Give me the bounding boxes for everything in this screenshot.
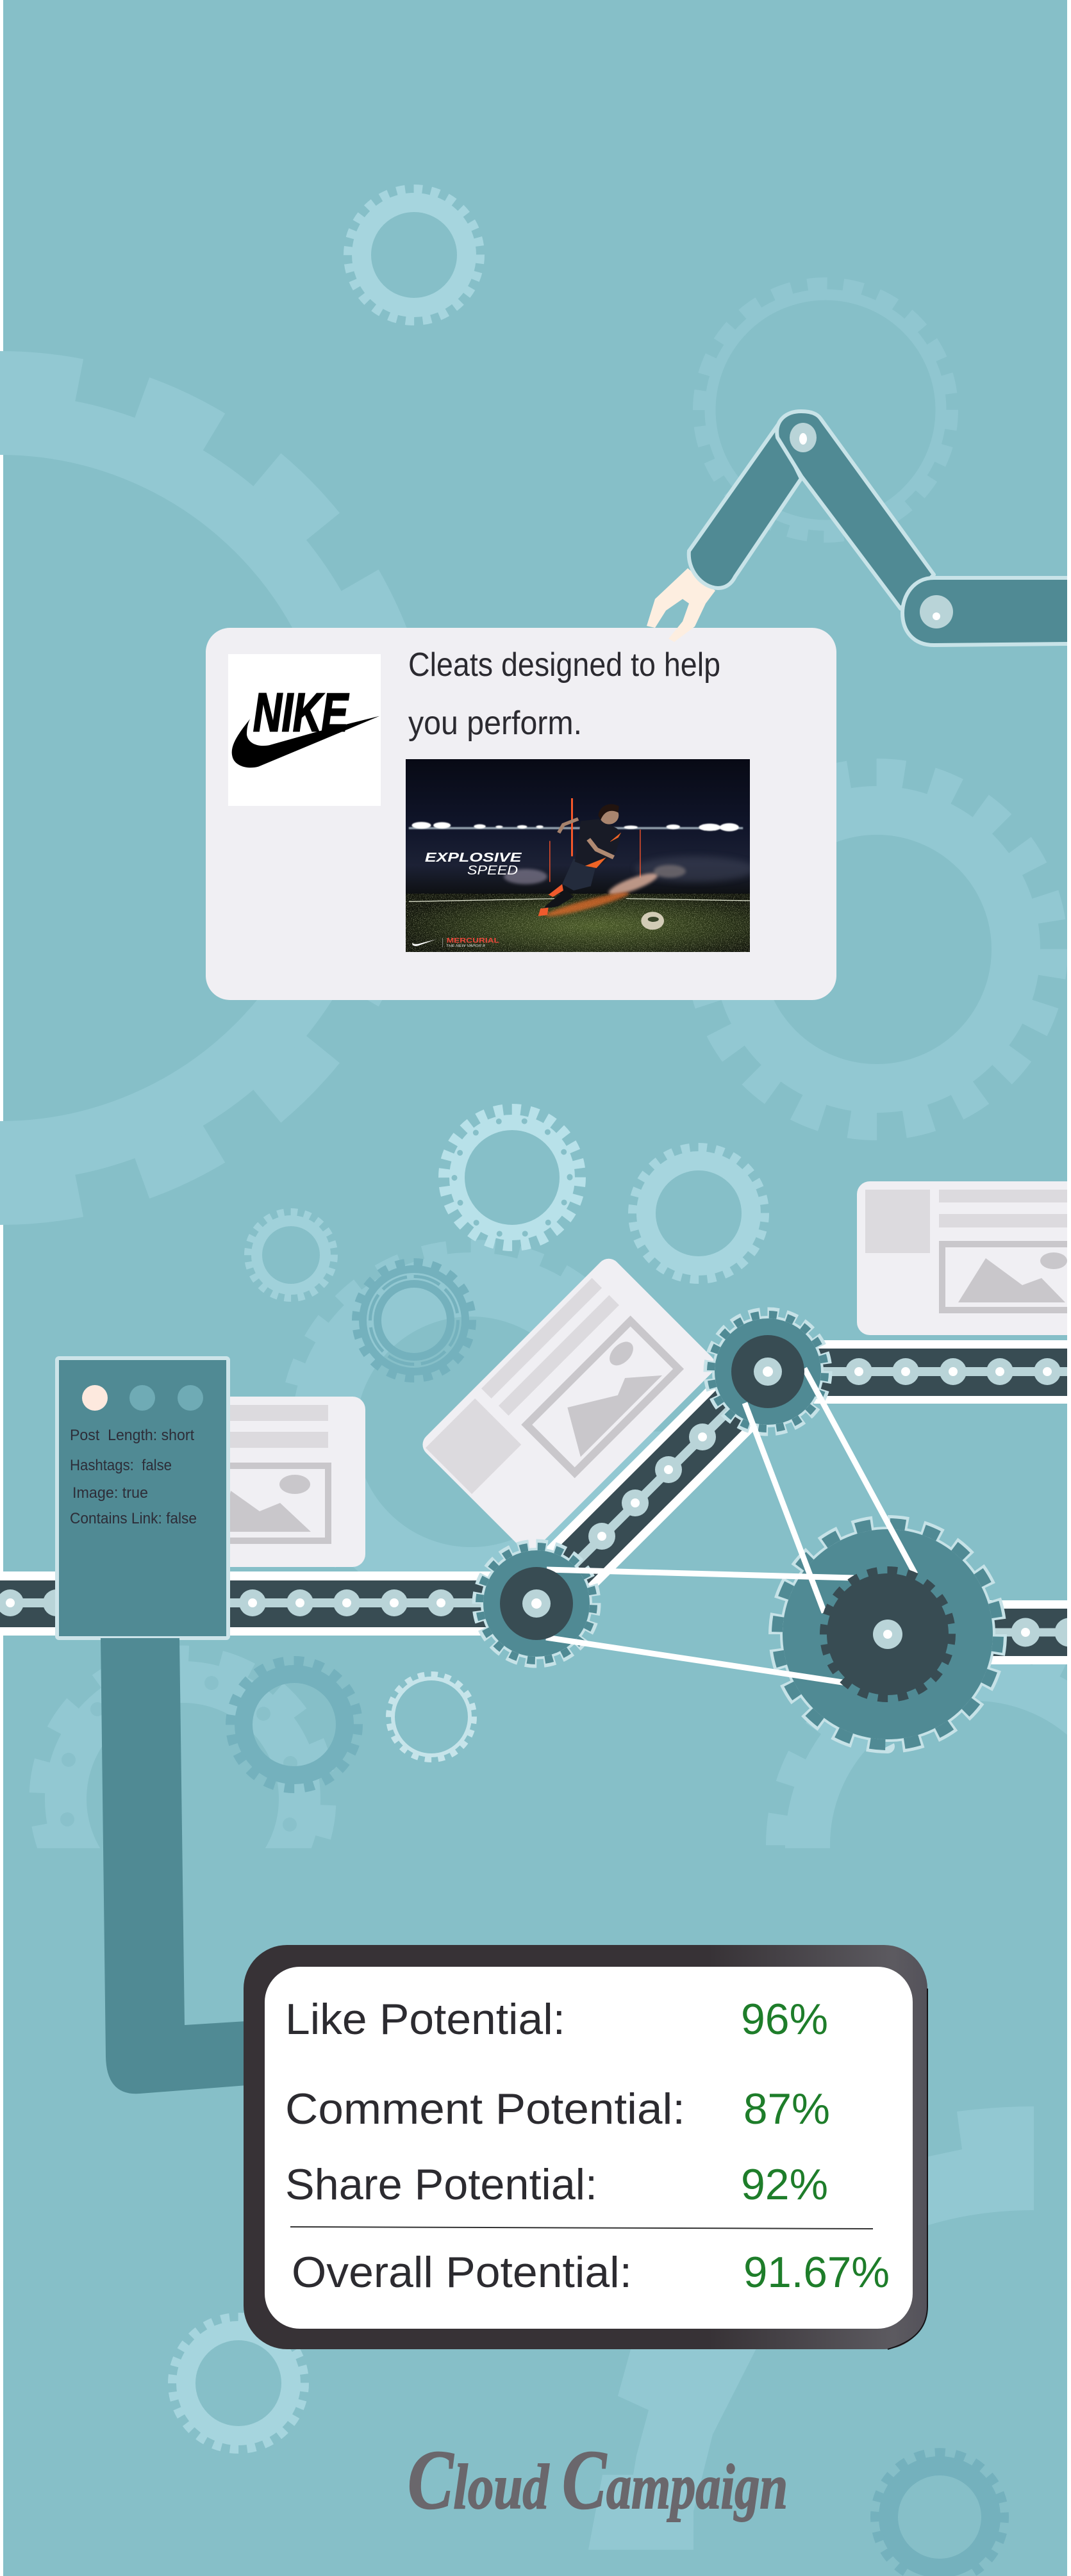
post text: you perform. <box>408 705 582 742</box>
photo: footballer advert: THE NEW VAPOR 8 <box>446 944 486 948</box>
overall potential row: 91.67% <box>743 2248 890 2297</box>
gear hubs <box>500 1335 952 1698</box>
conveyor belt: main lower <box>0 1571 545 1636</box>
arm base <box>902 578 1069 645</box>
gear: pale right <box>633 1148 764 1279</box>
comment potential row: Comment Potential: <box>285 2085 685 2133</box>
conveyor belt: upper right <box>814 1340 1071 1404</box>
gear fragment: faint right of panel <box>923 2106 1034 2227</box>
comment potential row: 87% <box>743 2085 830 2133</box>
post attributes <box>70 1427 197 1527</box>
Nike logo <box>228 654 381 806</box>
gear fragment: faint bottom <box>588 2345 758 2550</box>
gear: dark lower <box>231 1661 358 1788</box>
like potential row: Like Potential: <box>285 1995 565 2044</box>
upper arm <box>777 411 934 609</box>
gear: faint behind post card <box>700 773 1054 1126</box>
gear: pale small left <box>249 1212 333 1298</box>
gear: large faint left <box>0 373 415 1203</box>
indicator lights <box>82 1385 203 1411</box>
post attributes: Hashtags: false <box>70 1457 172 1474</box>
gear: faint lower left <box>29 1645 336 1848</box>
connecting pipe <box>101 1638 247 2094</box>
Nike logo: NIKE <box>253 682 349 742</box>
post attributes: Post Length: short <box>70 1427 194 1444</box>
share potential row <box>285 2160 828 2209</box>
photo: footballer advert: MERCURIAL <box>447 937 499 945</box>
photo: footballer advert: EXPLOSIVE <box>425 851 522 865</box>
brand logo text: Campaign <box>562 2432 788 2527</box>
gear: faint middle <box>286 1247 656 1617</box>
gear: pale bottom <box>173 2318 304 2449</box>
photo: footballer advert <box>406 759 754 952</box>
photo: footballer advert: SPEED <box>467 863 518 878</box>
share potential row: 92% <box>741 2160 828 2209</box>
post card with Nike ad <box>206 628 836 1000</box>
gear: pale dotted <box>445 1110 579 1245</box>
results panel <box>244 1945 927 2349</box>
post card: rotated on belt <box>418 1254 720 1555</box>
robot hand <box>647 568 715 642</box>
post card: top right <box>857 1181 1071 1335</box>
conveyor belt: lower right <box>961 1600 1071 1664</box>
post text <box>408 646 720 742</box>
gear: dark double ring <box>356 1263 472 1378</box>
gear: driver lower <box>478 1545 595 1662</box>
post attributes: Image: true <box>72 1484 148 1502</box>
gear: thin outline <box>389 1675 474 1759</box>
like potential row: 96% <box>741 1995 828 2044</box>
robot arm <box>647 411 1069 645</box>
gear: driver upper <box>709 1313 827 1430</box>
share potential row: Share Potential: <box>285 2160 597 2209</box>
gear: faint upper right <box>699 284 952 536</box>
gear: big main <box>776 1522 1000 1746</box>
overall potential row: Overall Potential: <box>292 2248 632 2297</box>
post card: left behind scanner <box>160 1397 365 1567</box>
overall potential row <box>292 2248 890 2297</box>
brand logo text: Cloud <box>408 2432 550 2527</box>
scanner box <box>57 1358 228 1638</box>
drive belts <box>546 1368 915 1683</box>
gear: dark bottom right <box>876 2453 1004 2576</box>
like potential row <box>285 1995 828 2044</box>
forearm <box>689 427 801 588</box>
conveyor belt: diagonal <box>536 1372 768 1603</box>
post attributes: Contains Link: false <box>70 1510 197 1527</box>
gear: pale top <box>349 190 479 320</box>
gear: faint lower right <box>766 1664 1067 1848</box>
brand logo text <box>408 2432 788 2527</box>
arm joints <box>790 423 953 628</box>
post text: Cleats designed to help <box>408 646 720 684</box>
